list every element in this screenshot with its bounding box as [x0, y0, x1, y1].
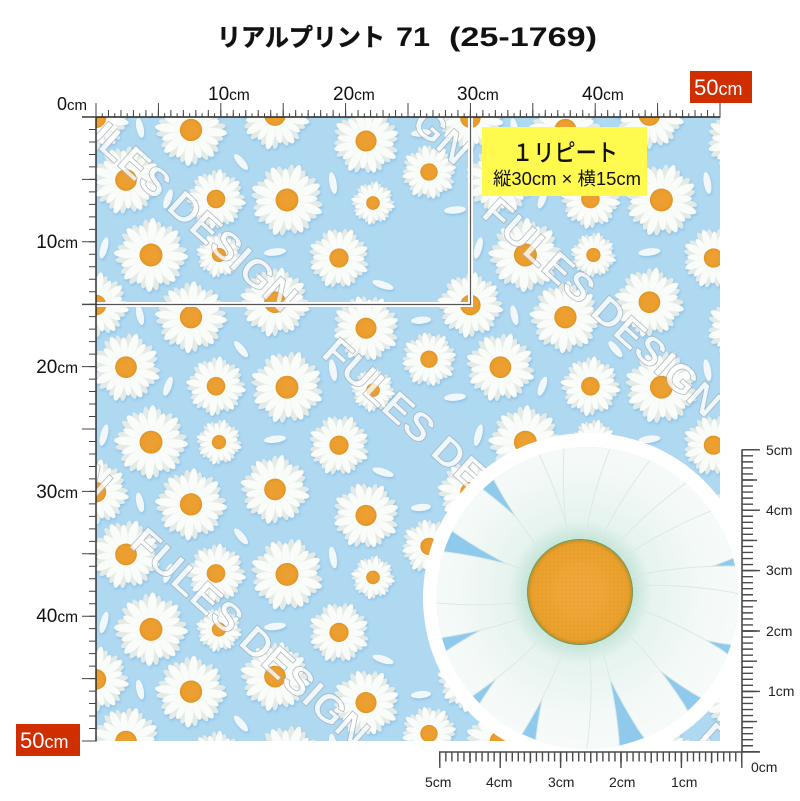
- title: [217, 22, 597, 52]
- scale labels: horizontal: 4cm: [486, 774, 512, 790]
- scale ruler: vertical 5cm: [742, 449, 751, 752]
- watermark text: GN: [404, 99, 479, 174]
- close-up petals: [436, 447, 738, 749]
- watermark text: N: [69, 454, 120, 507]
- callout: repeat size: 縦30cm × 横15cm: [493, 169, 641, 189]
- left ruler: [89, 116, 96, 742]
- left ruler labels: 40cm: [36, 606, 78, 627]
- scale labels: vertical: 3cm: [766, 562, 792, 578]
- scale labels: horizontal: 2cm: [609, 774, 635, 790]
- top ruler labels: 0cm: [57, 94, 87, 114]
- scale labels: horizontal: 1cm: [671, 774, 697, 790]
- panel: fabric swatch with daisy pattern: [96, 118, 720, 741]
- scale labels: vertical: 5cm: [766, 442, 792, 458]
- left ruler labels: 30cm: [36, 482, 78, 503]
- top ruler labels: 10cm: [208, 84, 250, 105]
- badge: 50cm top right: [690, 71, 752, 103]
- top ruler labels: 30cm: [457, 84, 499, 105]
- repeat outline: one repeat area: [82, 117, 470, 304]
- scale labels: vertical: 4cm: [766, 502, 792, 518]
- watermark text: FULES DESIGN: [50, 84, 306, 321]
- top ruler labels: 20cm: [333, 84, 375, 105]
- scale labels: horizontal: 0cm: [751, 759, 777, 775]
- scale labels: horizontal: 3cm: [548, 774, 574, 790]
- badge: 50cm top right: 50cm: [694, 75, 742, 100]
- badge: 50cm bottom left: [16, 724, 80, 756]
- scale labels: horizontal: [425, 759, 777, 790]
- left ruler labels: [36, 232, 78, 627]
- scale ruler: horizontal 5cm: [439, 752, 760, 760]
- top ruler labels: [57, 84, 624, 114]
- left ruler labels: 20cm: [36, 357, 78, 378]
- close-up circle of daisy: [423, 433, 738, 749]
- top ruler labels: 40cm: [582, 84, 624, 105]
- badge: 50cm bottom left: 50cm: [20, 728, 68, 753]
- watermark text: FULES DESIGN: [122, 519, 378, 756]
- left ruler labels: 10cm: [36, 232, 78, 253]
- scale labels: vertical: [766, 442, 794, 699]
- scale labels: vertical: 2cm: [766, 623, 792, 639]
- scale labels: vertical: 1cm: [768, 683, 794, 699]
- watermark text: FULES D: [581, 616, 741, 767]
- watermark text: FULES DESIGN: [474, 189, 730, 426]
- close-up flower disk: [527, 539, 633, 645]
- callout: repeat size: １リピート: [512, 140, 618, 167]
- title: リアルプリント: [217, 24, 385, 52]
- callout: repeat size: [482, 127, 647, 196]
- watermark text: [96, 118, 726, 742]
- top ruler: [82, 110, 721, 117]
- watermark text: FULES DESIGN: [314, 329, 570, 566]
- scale labels: horizontal: 5cm: [425, 774, 451, 790]
- title: (25-1769): [449, 22, 597, 52]
- title: 71: [396, 22, 430, 52]
